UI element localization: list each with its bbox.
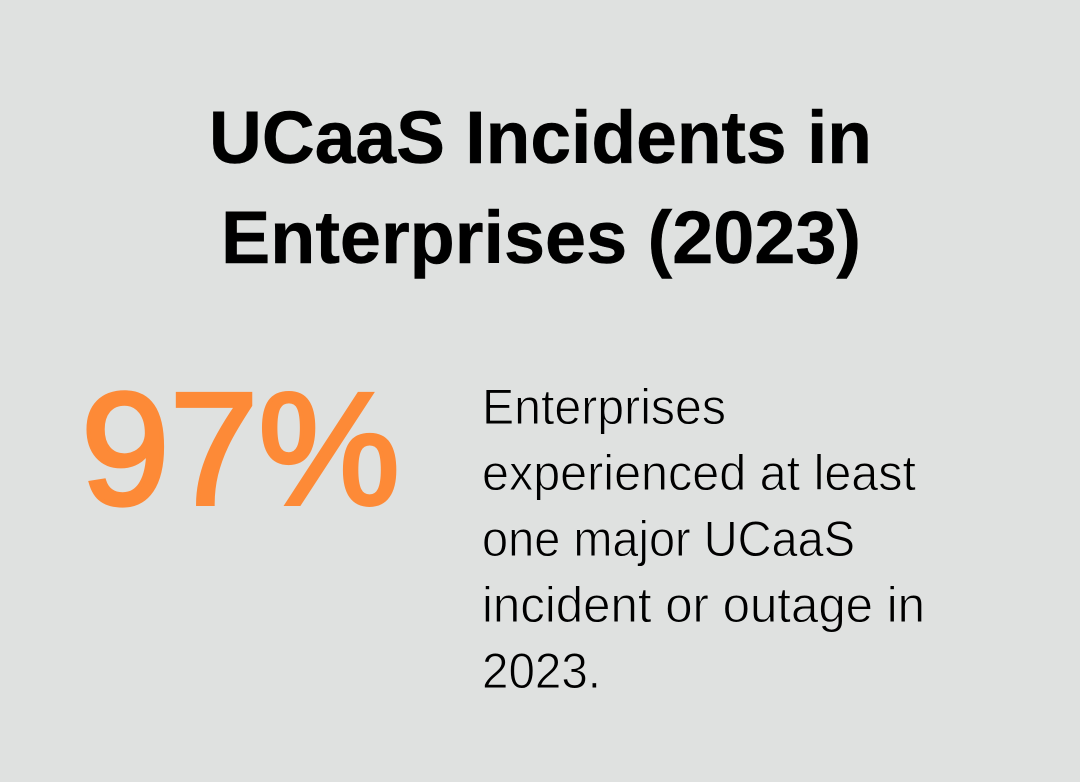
description text: Enterprises (482, 379, 726, 435)
title: UCaaS Incidents in (209, 96, 872, 179)
description text: experienced at least (482, 445, 916, 501)
description text: 2023. (482, 643, 601, 699)
title (209, 96, 872, 279)
big statistic: 97%: 97% (81, 359, 400, 538)
title: Enterprises (2023) (221, 196, 861, 279)
description text: one major UCaaS (482, 511, 855, 567)
description text (482, 379, 925, 699)
description text: incident or outage in (482, 577, 925, 633)
